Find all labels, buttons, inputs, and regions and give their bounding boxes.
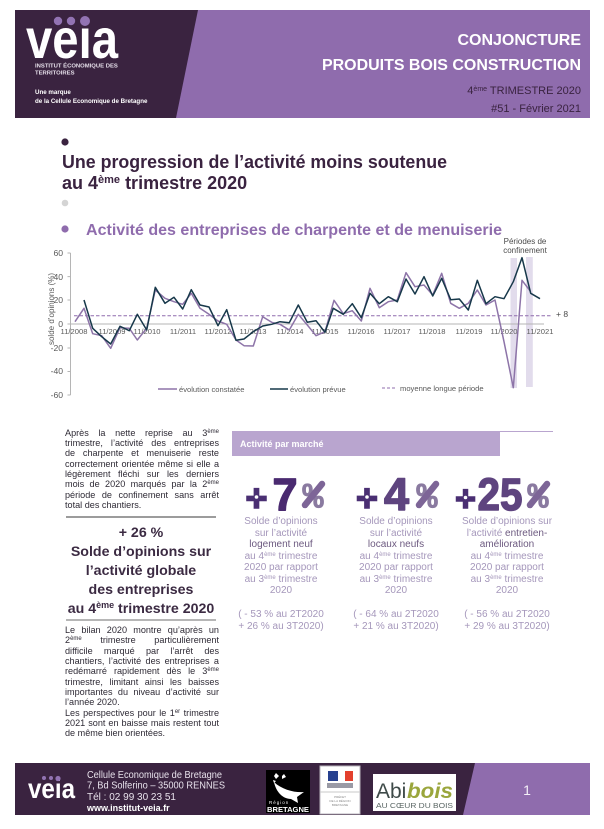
average value label: + 8	[556, 309, 568, 319]
text block: intro: légèrement fléchi sur les derniers	[65, 469, 219, 479]
main title: ème	[98, 174, 120, 186]
callout: +26 %	[68, 525, 214, 617]
annotation: periodes de confinement: confinement	[503, 246, 548, 255]
text: logement neuf: 2020 par rapport	[244, 562, 318, 573]
x axis labels: 11/2020	[491, 327, 517, 336]
text: locaux neufs: Solde d’opinions	[359, 516, 433, 527]
logo: abibois: bois	[407, 780, 453, 803]
text block: bilan: difficile marqué par l’arrêt des	[65, 646, 219, 656]
text block: bilan	[65, 625, 219, 738]
footer address: www.institut-veia.fr	[86, 803, 170, 813]
figure: +4%: +	[356, 478, 378, 520]
legend: évolution constatée	[179, 385, 244, 394]
banner title: PRODUITS BOIS CONSTRUCTION	[322, 57, 581, 74]
text: locaux neufs: au 4ème trimestre	[360, 550, 432, 562]
text block: bilan: 2ème trimestre particulièrement	[65, 635, 219, 645]
x axis labels: 11/2017	[384, 327, 410, 336]
x axis labels: 11/2009	[99, 327, 125, 336]
text block: intro: correctement orientée même si elle a	[65, 459, 219, 469]
text: locaux neufs: locaux neufs	[368, 539, 424, 550]
figure: +7%: 7	[272, 469, 298, 520]
x axis labels: 11/2019	[456, 327, 482, 336]
text block: bilan: trimestre, limitant ainsi les baisses	[65, 677, 219, 687]
brand tagline: de la Cellule Economique de Bretagne	[35, 98, 148, 105]
y axis labels: -60	[51, 390, 63, 400]
text block: bilan: de même bien orientées.	[65, 728, 165, 738]
text: entretien-amelioration: 2020 par rapport	[470, 562, 544, 573]
text block: intro: trimestre, l’activité des entreprises	[65, 438, 219, 448]
logo: abibois: Abi	[376, 780, 406, 803]
y axis title: solde d’opinions (%)	[47, 273, 56, 345]
logo: prefet: BRETAGNE	[332, 803, 348, 807]
text: entretien-amelioration	[462, 516, 552, 632]
main title: trimestre 2020	[120, 173, 247, 193]
page number: 1	[523, 782, 531, 798]
text: entretien-amelioration: au 4ème trimestre	[471, 550, 543, 562]
text: locaux neufs: 2020	[385, 585, 407, 596]
text: logement neuf: 2020	[270, 585, 292, 596]
callout: +26 %: + 26 %	[119, 525, 163, 541]
text: locaux neufs: ( - 64 % au 2T2020	[353, 609, 439, 620]
text block: bilan: Le bilan 2020 montre qu’après un	[65, 625, 219, 635]
text block: bilan: Les perspectives pour le 1er trimestre	[65, 708, 219, 718]
x axis labels: 11/2014	[277, 327, 303, 336]
text: entretien-amelioration: l’activité entretien-	[467, 528, 547, 538]
edition: 4	[467, 85, 581, 97]
text: locaux neufs: 2020 par rapport	[359, 562, 433, 573]
legend	[158, 384, 484, 394]
x axis labels: 11/2012	[205, 327, 231, 336]
logo: prefet	[320, 766, 360, 814]
long-term average line	[74, 315, 551, 317]
text: locaux neufs: au 3ème trimestre	[360, 574, 432, 584]
brand tagline: Une marque	[35, 89, 71, 96]
text: locaux neufs: + 21 % au 3T2020)	[353, 620, 439, 632]
text: logement neuf: sur l’activité	[255, 528, 307, 538]
x axis labels: 11/2013	[240, 327, 266, 336]
legend: moyenne longue période	[400, 384, 484, 393]
callout: +26 %: Solde d’opinions sur	[71, 544, 211, 560]
text block: bilan: l’année 2020.	[65, 697, 120, 707]
text: logement neuf: au 4ème trimestre	[245, 550, 317, 562]
bullet: purple	[61, 225, 69, 233]
text block: bilan: chantiers, l’activité des entreprises a	[65, 656, 219, 666]
y axis labels: 20	[53, 295, 63, 305]
section band: activite par marche	[232, 431, 553, 456]
x axis labels: 11/2018	[419, 327, 445, 336]
y axis labels: 0	[58, 319, 63, 329]
figure: +7%	[245, 469, 324, 520]
y axis labels: -40	[51, 366, 63, 376]
line chart	[47, 237, 568, 400]
section heading: Activité des entreprises de charpente et de menuiserie	[86, 222, 502, 239]
y axis labels	[51, 248, 63, 400]
figure: +25%: +	[455, 478, 476, 519]
x axis labels: 11/2021	[527, 327, 553, 336]
text block: bilan: 2021 sont en baisse mais restent tout	[65, 718, 219, 728]
logo: prefet: DE LA RÉGION	[329, 798, 351, 803]
figure: +4%: %	[416, 478, 438, 518]
x axis labels: 11/2010	[134, 327, 160, 336]
main title: Une progression de l’activité moins soutenue	[62, 152, 447, 172]
text block: intro: période de confinement sans arrêt	[65, 490, 219, 500]
text: entretien-amelioration: Solde d’opinions sur	[462, 516, 552, 527]
footer banner	[15, 763, 590, 815]
x axis labels: 11/2016	[348, 327, 374, 336]
logo: region bretagne: Région	[269, 800, 289, 805]
footer address: 7, Bd Solferino – 35000 RENNES	[87, 780, 225, 792]
text: logement neuf: + 26 % au 3T2020)	[238, 620, 324, 632]
logo: abibois	[373, 774, 456, 811]
figure: +4%: 4	[384, 469, 409, 520]
edition: ème	[473, 86, 487, 93]
text: logement neuf: Solde d’opinions	[244, 516, 318, 527]
series: évolution constatée	[75, 273, 531, 388]
figure: +25%	[455, 469, 549, 520]
text block: intro: Après la nette reprise au 3ème	[65, 428, 219, 438]
logo subtitle: INSTITUT ÉCONOMIQUE DES	[35, 62, 118, 70]
section band: activite par marche: Activité par marché	[240, 439, 324, 449]
text block: intro: mois de 2020 marqués par la 2ème	[65, 479, 219, 489]
logo: abibois: AU CŒUR DU BOIS	[376, 801, 453, 810]
text block: intro: de charpente et menuiserie reste	[65, 448, 219, 458]
y axis labels: 60	[53, 248, 63, 258]
legend: évolution prévue	[290, 385, 346, 394]
text block: intro: total des chantiers.	[65, 500, 141, 510]
y axis labels: -20	[51, 343, 63, 353]
x axis labels: 11/2008	[61, 327, 87, 336]
figure: +25%: %	[527, 478, 549, 518]
text: logement neuf: au 3ème trimestre	[245, 574, 317, 584]
callout: +26 %: des entreprises	[89, 582, 193, 598]
main title: au 4	[62, 173, 247, 193]
text block: bilan: importantes du niveau d’activité sur	[65, 687, 219, 697]
figure: +7%: %	[302, 478, 324, 518]
banner title: CONJONCTURE	[457, 32, 581, 49]
y axis labels: 40	[53, 272, 63, 282]
text: entretien-amelioration: au 3ème trimestre	[471, 574, 543, 584]
figure: +25%: 25	[478, 469, 522, 520]
logo: region bretagne	[266, 770, 310, 814]
figure: +7%: +	[245, 478, 268, 520]
logo subtitle: TERRITOIRES	[35, 70, 75, 76]
logo: region bretagne: BRETAGNE	[267, 805, 309, 814]
text: locaux neufs: sur l’activité	[370, 528, 422, 538]
footer address: Tél : 02 99 30 23 51	[87, 792, 176, 803]
bullet: grey	[62, 200, 68, 206]
series: évolution prévue	[84, 258, 540, 344]
text block: intro	[65, 428, 220, 510]
left column rules	[66, 517, 216, 620]
text: locaux neufs	[353, 516, 439, 632]
callout: +26 %: l’activité globale	[86, 563, 196, 579]
text: entretien-amelioration: + 29 % au 3T2020)	[464, 620, 550, 632]
text: entretien-amelioration: ( - 56 % au 2T2020	[464, 609, 550, 620]
annotation: periodes de confinement: Périodes de	[504, 237, 547, 246]
text: entretien-amelioration: 2020	[496, 585, 518, 596]
callout: +26 %: au 4ème trimestre 2020	[68, 600, 214, 617]
edition: #51 - Février 2021	[491, 103, 581, 115]
axes	[68, 253, 544, 395]
bullet: dark	[61, 138, 69, 146]
logo: veia: veia	[26, 7, 119, 70]
x axis labels	[61, 327, 553, 336]
text: entretien-amelioration: amélioration	[480, 539, 534, 550]
x axis labels: 11/2015	[312, 327, 338, 336]
footer logo: veia	[28, 773, 75, 804]
confinement bands	[510, 257, 533, 388]
header banner	[15, 7, 590, 118]
text block: bilan: redémarré rapidement dès le 3ème	[65, 666, 219, 676]
footer address: Cellule Economique de Bretagne	[87, 770, 222, 781]
text: logement neuf	[238, 516, 324, 632]
figure: +4%	[356, 469, 438, 520]
text: logement neuf: ( - 53 % au 2T2020	[238, 609, 324, 620]
x axis labels: 11/2011	[170, 327, 196, 336]
edition: TRIMESTRE 2020	[487, 85, 581, 97]
logo: prefet: PRÉFET	[334, 794, 346, 799]
text: logement neuf: logement neuf	[249, 539, 313, 550]
